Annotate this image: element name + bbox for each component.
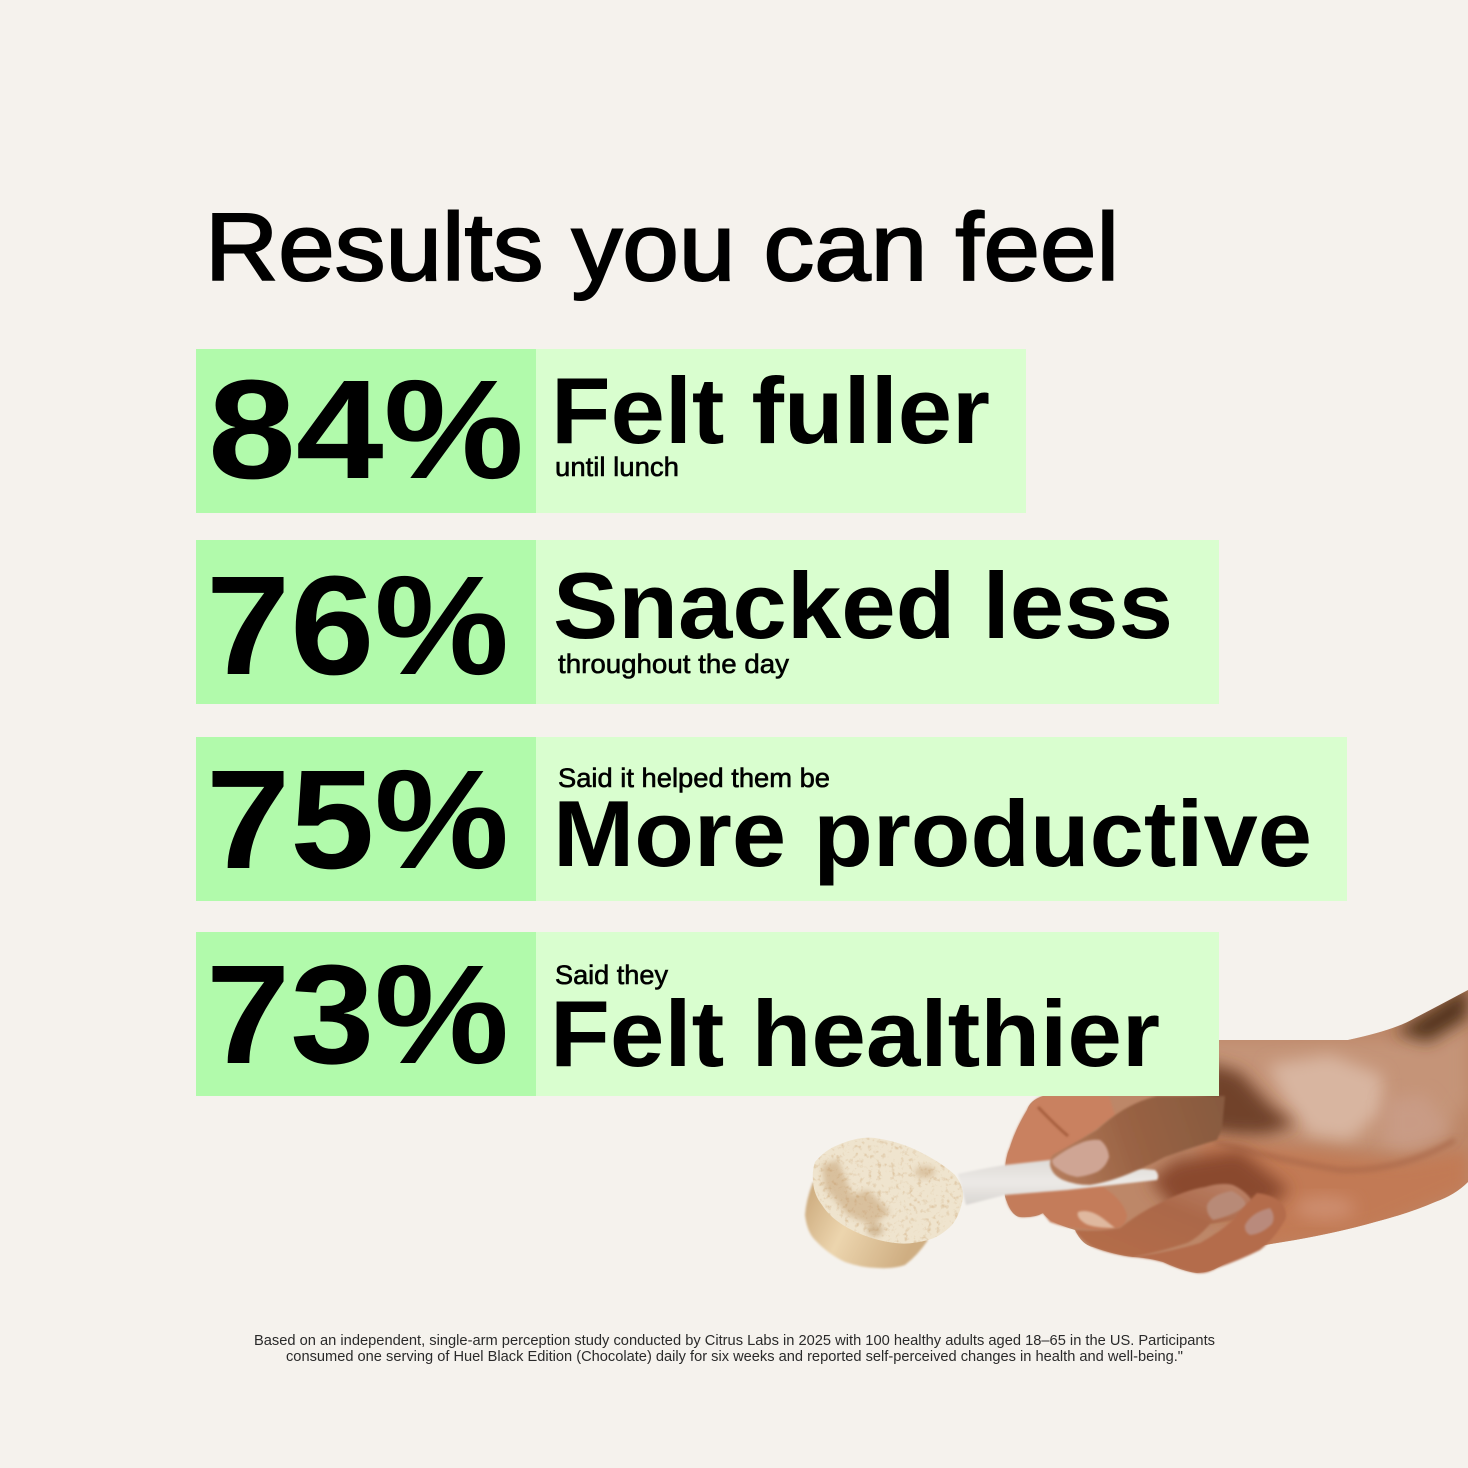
sub label: Said it helped them be — [558, 763, 830, 793]
row 2: snacked less — [196, 540, 1219, 704]
middle finger — [1075, 1184, 1253, 1257]
footnote — [254, 1333, 1215, 1365]
percent block — [196, 932, 536, 1096]
index finger upper segment — [1005, 1096, 1115, 1170]
light bar — [536, 540, 1219, 704]
sub label: throughout the day — [558, 649, 790, 679]
footnote: Based on an independent, single-arm perception study conducted by Citrus Labs in 2025 with 100 healthy adults aged 18–65 in the US. Participants — [254, 1333, 1215, 1349]
illustration: hand holding scoop of powder — [805, 985, 1468, 1280]
headline: Snacked less — [553, 553, 1173, 658]
light bar — [536, 349, 1026, 513]
percent value: 84% — [208, 350, 524, 508]
hand silhouette with back-of-hand shading — [1000, 985, 1468, 1280]
hand — [958, 985, 1468, 1280]
row 1: felt fuller — [196, 349, 1026, 513]
index finger lower segment — [1005, 1185, 1127, 1230]
thumb — [1050, 1096, 1225, 1185]
light bar — [536, 737, 1347, 901]
row 4: felt healthier — [196, 932, 1219, 1096]
headline: Felt healthier — [550, 981, 1160, 1086]
scoop handle — [958, 1160, 1158, 1205]
percent value: 76% — [206, 546, 509, 704]
thumbnail — [1052, 1140, 1109, 1177]
title: Results you can feel — [205, 194, 1119, 301]
scoop cup — [805, 1182, 928, 1268]
percent block — [196, 737, 536, 901]
powder — [812, 1138, 963, 1244]
index finger crease — [1038, 1107, 1068, 1136]
index fingernail — [1078, 1211, 1115, 1228]
ring fingernail — [1245, 1208, 1274, 1235]
percent value: 75% — [206, 740, 509, 898]
sub label: until lunch — [555, 452, 679, 482]
ring finger — [1133, 1193, 1286, 1273]
light bar — [536, 932, 1219, 1096]
percent value: 73% — [206, 935, 509, 1093]
row 3: more productive — [196, 737, 1347, 901]
headline: More productive — [553, 781, 1312, 886]
percent block — [196, 349, 536, 513]
headline: Felt fuller — [551, 358, 990, 463]
footnote: consumed one serving of Huel Black Edition (Chocolate) daily for six weeks and reported self-perceived changes in health and well-being." — [286, 1349, 1183, 1365]
middle fingernail — [1207, 1191, 1246, 1220]
percent block — [196, 540, 536, 704]
sub label: Said they — [555, 960, 668, 990]
